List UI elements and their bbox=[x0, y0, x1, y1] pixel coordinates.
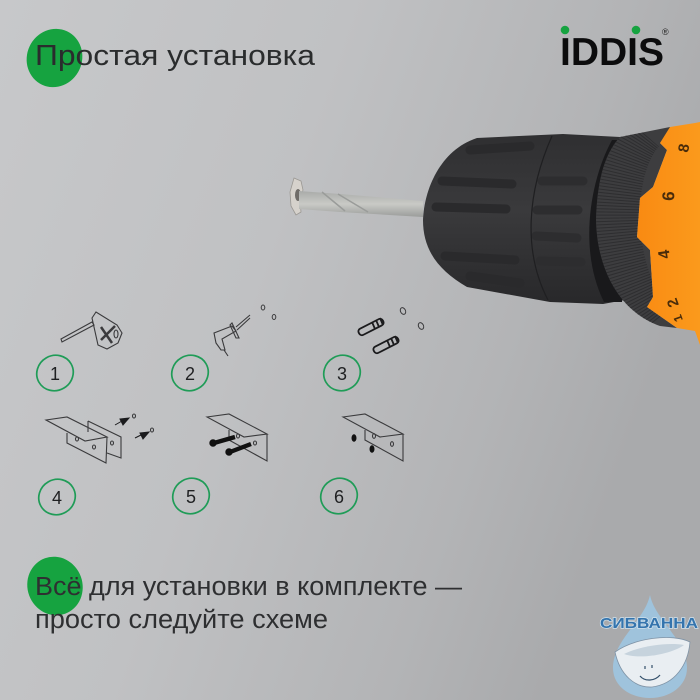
icon: drill bbox=[214, 315, 250, 356]
caption line 2: просто следуйте схеме bbox=[35, 606, 328, 634]
caption line 1: Всё для установки в комплекте — bbox=[35, 573, 463, 601]
icon: mounted bracket bbox=[343, 414, 403, 461]
step number: 5 bbox=[186, 487, 196, 507]
arrow upper bbox=[115, 418, 129, 425]
step number circle bbox=[30, 349, 80, 397]
drill marks bbox=[261, 305, 276, 320]
water drop bbox=[613, 595, 687, 698]
step number circle bbox=[314, 472, 364, 520]
torque scale numbers: 2 bbox=[664, 296, 683, 309]
registered mark: ® bbox=[662, 27, 669, 37]
collar knurling bbox=[615, 130, 650, 325]
torque scale numbers: 1 bbox=[670, 312, 686, 324]
icon: bracket with wall plate bbox=[46, 414, 154, 463]
collar base bbox=[596, 127, 677, 328]
step number circle bbox=[317, 349, 367, 397]
chuck collar ribs bbox=[536, 181, 583, 262]
icon: template with pencil bbox=[61, 312, 122, 349]
drill bit bbox=[299, 191, 423, 217]
drill chuck bbox=[423, 134, 625, 304]
step 3 bbox=[317, 307, 425, 397]
chuck seam bbox=[531, 136, 552, 300]
photo: drill in wall bbox=[290, 120, 700, 345]
green accent blob behind heading bbox=[17, 20, 92, 96]
watermark text: СИБВАННА bbox=[600, 615, 698, 632]
icon: bracket with screws bbox=[207, 414, 267, 461]
step number: 2 bbox=[185, 364, 195, 384]
screws bbox=[210, 437, 251, 455]
step 5 bbox=[166, 414, 267, 520]
torque scale numbers: 6 bbox=[659, 191, 678, 201]
plug holes bbox=[399, 307, 425, 330]
logo dot left bbox=[561, 26, 569, 34]
step 4 bbox=[32, 414, 154, 521]
step number: 3 bbox=[337, 364, 347, 384]
step 1 bbox=[30, 312, 122, 397]
collar shadow bbox=[589, 140, 622, 302]
hole shadow bbox=[295, 189, 301, 201]
torque scale numbers: 4 bbox=[656, 249, 674, 260]
torque scale numbers bbox=[656, 143, 693, 324]
torque scale numbers: 8 bbox=[675, 143, 693, 154]
knurled collar ring bbox=[596, 127, 677, 328]
drill hole bbox=[290, 178, 303, 215]
step number: 6 bbox=[334, 487, 344, 507]
step 2 bbox=[165, 305, 276, 397]
drill orange body bbox=[637, 122, 700, 345]
step 6 bbox=[314, 414, 403, 520]
brand logo: IDDIS bbox=[560, 26, 669, 74]
bathtub inner bbox=[624, 644, 684, 656]
drill bit flute bbox=[322, 192, 368, 212]
chuck ribs bbox=[436, 146, 530, 283]
step number circle bbox=[165, 349, 215, 397]
heading text: Простая установка bbox=[35, 40, 316, 72]
green accent blob behind caption bbox=[19, 549, 91, 623]
step number circle bbox=[32, 473, 82, 521]
step number circle bbox=[166, 472, 216, 520]
caption block bbox=[19, 549, 463, 634]
arrow lower bbox=[135, 432, 149, 439]
bathtub face bbox=[640, 665, 660, 680]
icon: wall plugs bbox=[357, 318, 400, 354]
screw heads bbox=[352, 434, 374, 453]
heading: simple installation bbox=[17, 20, 316, 96]
step number: 1 bbox=[50, 364, 60, 384]
step number: 4 bbox=[52, 488, 62, 508]
watermark: СИБВАННА bbox=[600, 595, 698, 698]
logo dot right bbox=[632, 26, 640, 34]
logo wordmark: IDDIS bbox=[560, 31, 664, 74]
bathtub bbox=[615, 637, 690, 687]
